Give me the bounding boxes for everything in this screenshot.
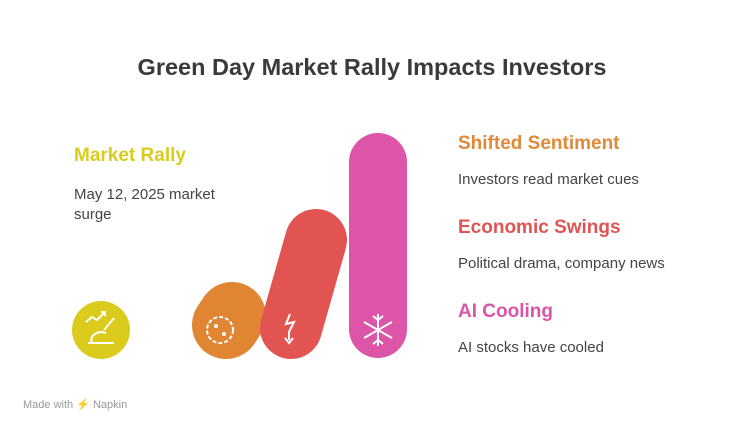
title: Green Day Market Rally Impacts Investors [138,54,606,80]
heading: market rally: Market Rally [74,145,186,166]
text: market rally: surge [74,206,112,223]
bar: red [285,240,316,343]
heading: economic swings: Economic Swings [458,217,621,238]
text: economic swings: Political drama, company news [458,255,665,272]
heading: ai cooling: AI Cooling [458,301,553,322]
footer: made with napkin: Made with ⚡ Napkin [23,399,127,411]
text: market rally: May 12, 2025 market [74,186,215,203]
icon: yellow circle [72,301,130,359]
text: ai cooling: AI stocks have cooled [458,339,604,356]
heading: shifted sentiment: Shifted Sentiment [458,133,620,154]
bar: orange [207,316,233,343]
text: shifted sentiment: Investors read market cues [458,171,639,188]
bar: pink [364,162,392,346]
text: market rally [74,186,215,223]
